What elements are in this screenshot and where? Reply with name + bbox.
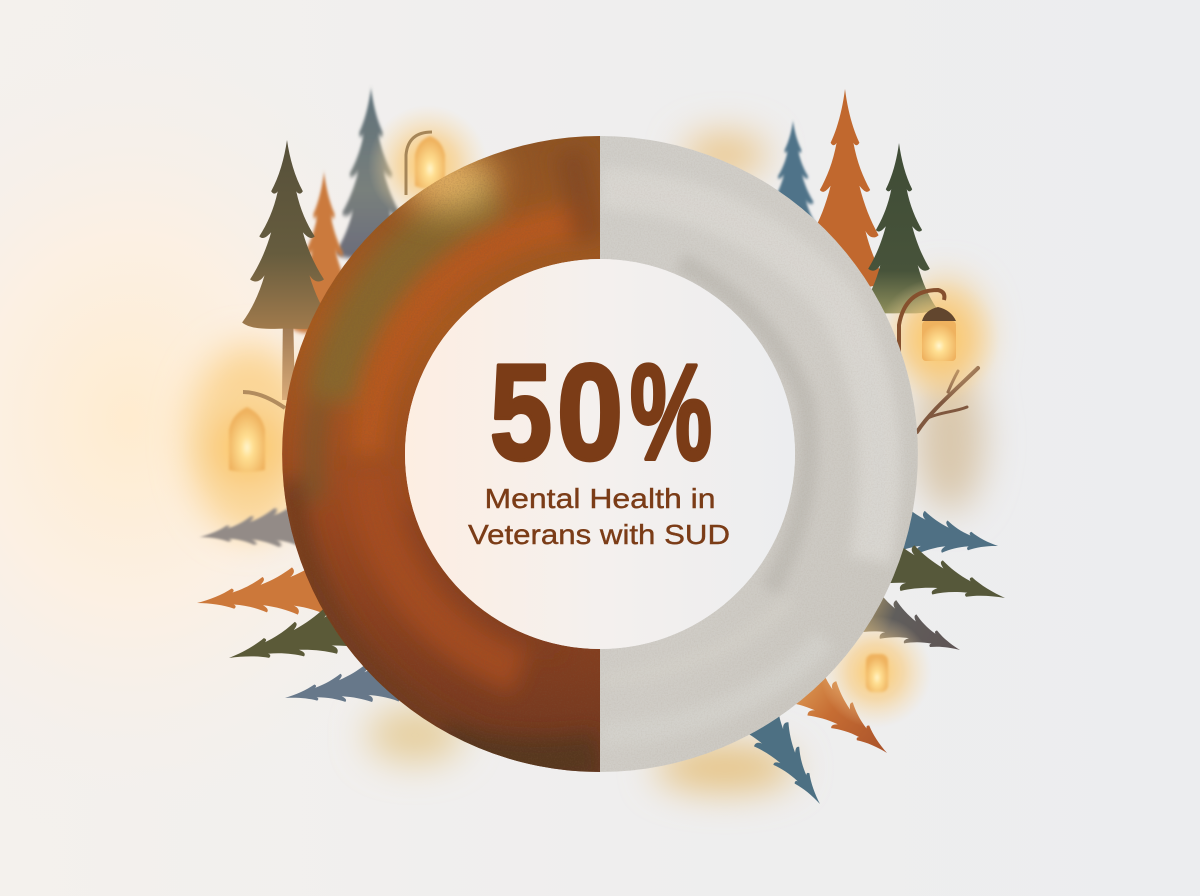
- tree: orange fir: [292, 172, 356, 333]
- centre label: [468, 336, 730, 550]
- donut segment: filled 50 percent: [270, 130, 605, 780]
- bare branch right: [917, 368, 978, 432]
- branch: olive: [222, 593, 374, 686]
- soft background glows behind foliage: [188, 133, 984, 792]
- centre label: Veterans with SUD: [468, 519, 730, 550]
- infographic canvas: [0, 88, 1007, 817]
- branch: blue: [281, 655, 402, 721]
- trees: upper left cluster: [242, 88, 407, 400]
- tree: grey-blue fir: [335, 88, 407, 258]
- lower left branches: [193, 500, 402, 721]
- donut segment: remaining 50 percent: [595, 130, 930, 780]
- big percentage: 0: [557, 336, 623, 488]
- branch: grey: [853, 585, 970, 673]
- lantern: lower right: [820, 616, 932, 728]
- big percentage: [490, 336, 712, 488]
- donut chart: 50 percent: [270, 130, 930, 780]
- branch: grey: [197, 500, 308, 561]
- big percentage: 5: [490, 336, 552, 488]
- tree: dark green fir: [862, 143, 936, 313]
- trees: upper right cluster: [768, 89, 936, 313]
- branch: blue lower: [733, 695, 841, 819]
- big percentage: %: [630, 336, 712, 488]
- donut centre hole: [405, 259, 795, 649]
- branch: blue: [889, 501, 1003, 572]
- tree: olive fir: [242, 140, 332, 329]
- lower right branches: [733, 501, 1013, 819]
- branch: orange: [193, 558, 333, 632]
- caption: Mental Health in: [484, 483, 716, 514]
- lantern: left: [181, 382, 313, 514]
- branch: orange: [781, 658, 904, 774]
- lantern: top left: [368, 105, 488, 225]
- tree: blue fir: [768, 121, 818, 232]
- tree: orange fir: [804, 89, 886, 287]
- lantern: right: [876, 278, 1000, 402]
- branch: olive: [864, 530, 1013, 626]
- tree trunk: [282, 310, 295, 400]
